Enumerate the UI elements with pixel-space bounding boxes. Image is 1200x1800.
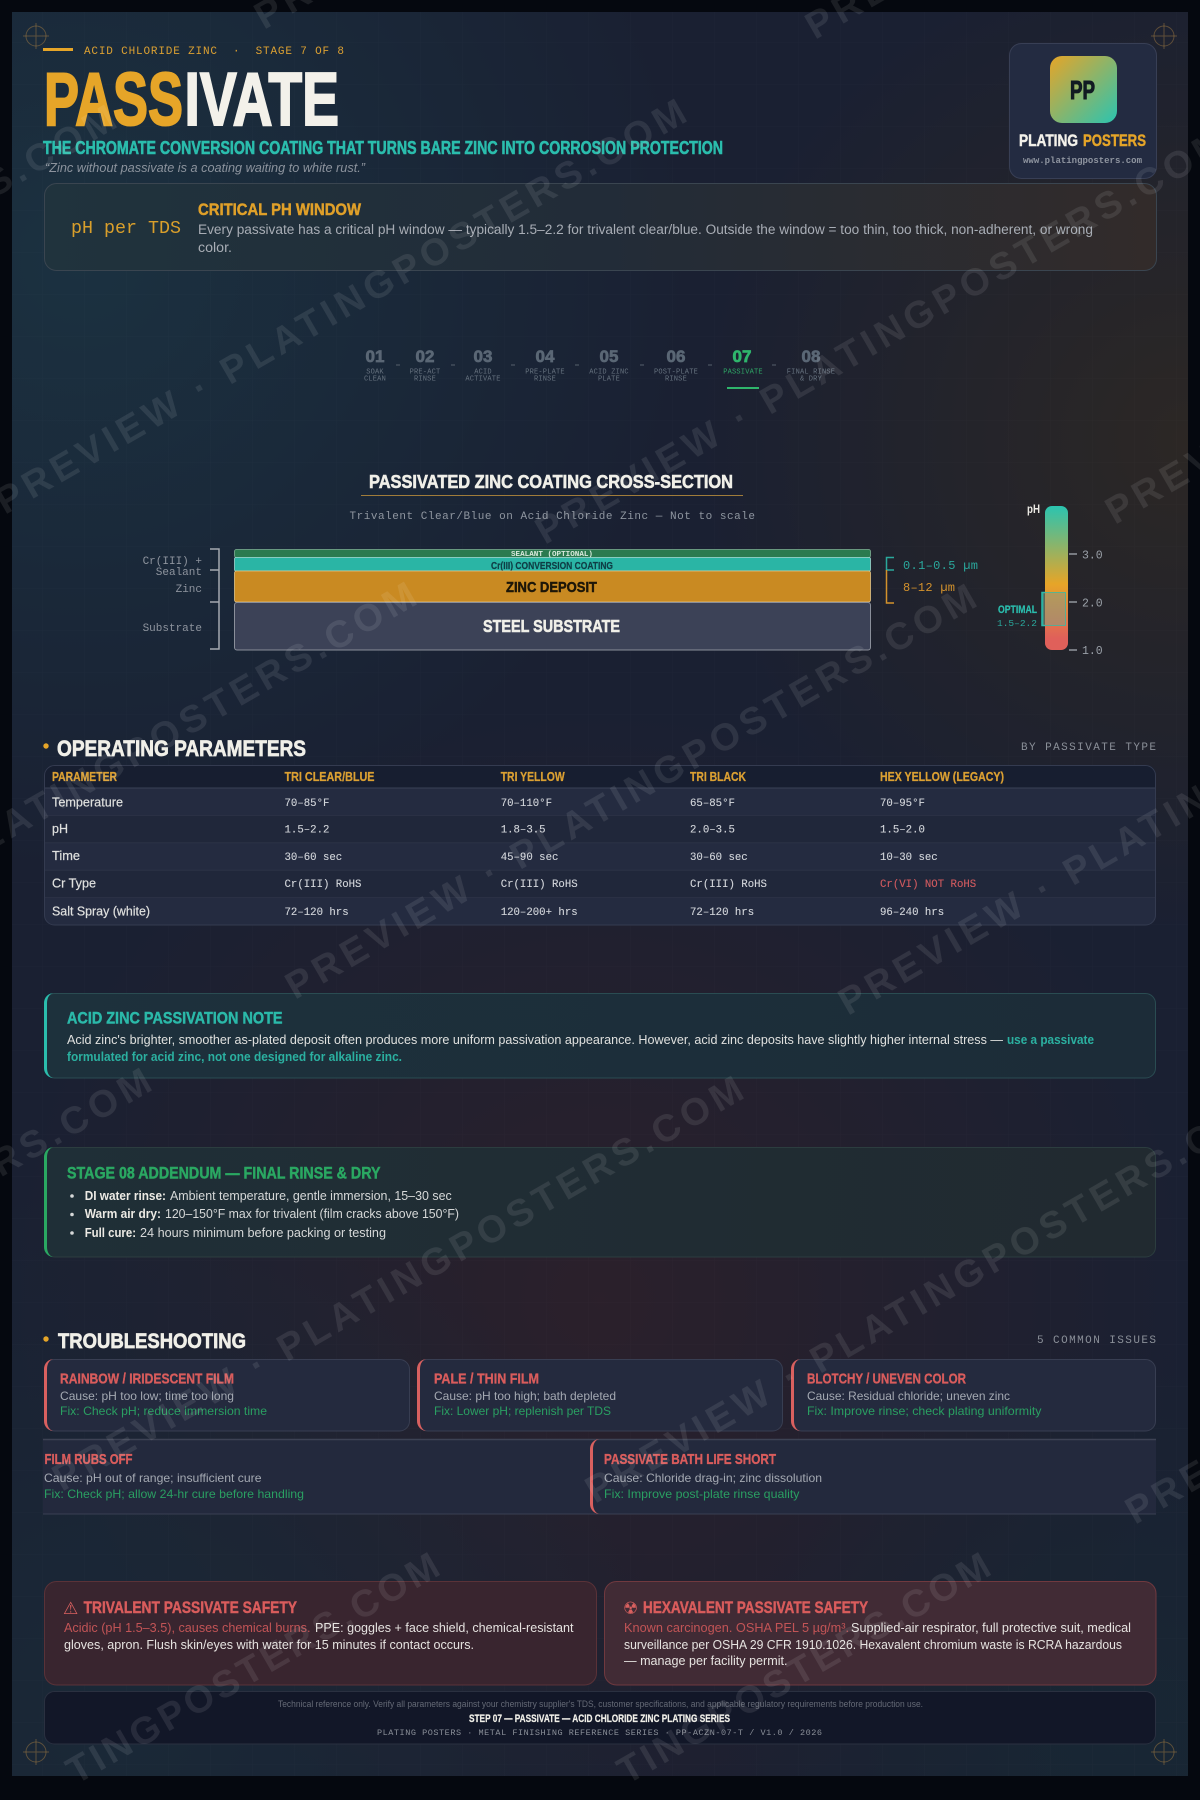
row: salt spray: 120–200+ hrs [501,907,578,919]
parameters table [44,765,1156,925]
section heading: operating parameters: OPERATING PARAMETERS [57,736,306,761]
row: time: Time [52,848,80,863]
safety text: PPE: goggles + face shield, chemical-resistant [315,1620,574,1635]
process step tracker: PRE-ACT [410,368,440,376]
header [43,46,723,175]
process step tracker: ACTIVATE [465,376,501,384]
logo name: PLATING [1019,132,1078,150]
logo name [1019,132,1146,150]
row: Cr type: Cr(III) RoHS [284,879,361,891]
safety text [624,1620,1131,1668]
table header: HEX YELLOW (LEGACY) [880,770,1004,784]
row: salt spray [52,904,944,919]
scale ticks: 1.0 [1082,645,1103,658]
row: salt spray: 72–120 hrs [690,907,754,919]
scale bar [1045,506,1068,650]
optimal band: OPTIMAL [998,604,1037,616]
layer: zinc deposit [234,571,870,602]
table header: TRI CLEAR/BLUE [284,770,374,784]
process step tracker: 06 [667,347,685,366]
row: salt spray: Salt Spray (white) [52,904,150,918]
card: film rubs off [43,1439,590,1514]
section heading: troubleshooting [43,1329,1156,1353]
card: pale film: Cause: pH too high; bath depleted [434,1389,616,1403]
addendum list: DI water rinse: [85,1188,166,1203]
safety text: Supplied-air respirator, full protective suit, medical [851,1620,1131,1635]
card: blotchy color: Cause: Residual chloride; uneven zinc [807,1389,1010,1403]
note body: Acid zinc's brighter, smoother as-plated deposit often produces more uniform passivation appearance. However, acid zinc deposits have slightly higher internal stress — [67,1032,1003,1047]
section heading: operating parameters [43,736,1156,761]
process step tracker: 07 [733,347,751,366]
safety text: — manage per facility permit. [624,1653,788,1668]
callout heading: CRITICAL PH WINDOW [198,201,361,219]
process step tracker: 02 [416,347,434,366]
card: bath life short: Fix: Improve post-plate rinse quality [604,1487,800,1501]
card: pale film: Fix: Lower pH; replenish per TDS [434,1404,611,1418]
process step tracker: CLEAN [364,376,386,384]
panel: acid zinc passivation note [44,993,1156,1078]
process step tracker: FINAL RINSE [787,368,835,376]
row: Cr type: Cr(VI) NOT RoHS [880,879,976,891]
process step tracker: 04 [536,347,555,366]
watermarks: PREVIEW · PLATINGPOSTERS.COM [0,91,694,523]
note body [67,1032,1094,1064]
process step tracker: RINSE [414,376,436,384]
row: temperature [52,794,925,810]
quote: “Zinc without passivate is a coating waiting to white rust.” [45,161,366,175]
watermarks: PREVIEW · PLATINGPOSTERS.COM [278,576,984,1008]
row: Cr type [52,876,976,891]
subtitle: THE CHROMATE CONVERSION COATING THAT TURNS BARE ZINC INTO CORROSION PROTECTION [43,138,723,158]
process step tracker: 03 [474,347,492,366]
process step tracker: 05 [600,347,618,366]
note heading: ACID ZINC PASSIVATION NOTE [67,1010,282,1028]
row: temperature: 70–85°F [284,798,329,810]
row: temperature: 70–95°F [880,798,925,810]
section heading: troubleshooting: TROUBLESHOOTING [58,1329,246,1353]
row: Cr type: Cr(III) RoHS [690,879,767,891]
addendum list: 24 hours minimum before packing or testing [140,1225,386,1240]
section heading: troubleshooting: 5 COMMON ISSUES [1037,1335,1156,1347]
row: pH: pH [52,821,68,836]
row: temperature: Temperature [52,794,123,810]
callout body [198,222,1093,255]
table header: TRI YELLOW [501,770,565,784]
eyebrow: · [233,46,240,58]
card: rainbow film: RAINBOW / IRIDESCENT FILM [60,1370,234,1388]
footer [44,1692,1156,1744]
addendum list: Warm air dry: [85,1206,161,1221]
logo name: POSTERS [1083,132,1146,150]
row: time: 45–90 sec [501,852,558,864]
row: time: 10–30 sec [880,852,938,864]
layer: zinc deposit: ZINC DEPOSIT [506,579,597,596]
row: temperature: 65–85°F [690,798,735,810]
addendum list [70,1188,459,1240]
layer: conversion coating [234,558,870,572]
cross-section diagram [143,549,978,650]
row: pH: 1.8–3.5 [501,824,546,836]
logo url: www.platingposters.com [1023,156,1143,166]
footer title: STEP 07 — PASSIVATE — ACID CHLORIDE ZINC PLATING SERIES [469,1713,730,1725]
icon: PP mark [1050,56,1117,123]
scale ticks: 2.0 [1082,598,1103,610]
row: salt spray: 96–240 hrs [880,907,944,919]
addendum list: Ambient temperature, gentle immersion, 15–30 sec [170,1188,452,1203]
layer: sealant [234,550,870,559]
diagram heading: PASSIVATED ZINC COATING CROSS-SECTION [369,472,733,492]
process step tracker: PASSIVATE [723,368,763,376]
process step tracker [364,347,835,389]
card: bath life short: Cause: Chloride drag-in; zinc dissolution [604,1471,822,1485]
left layer labels: Substrate [143,623,202,635]
left layer labels: Sealant [156,567,202,579]
card: film rubs off: FILM RUBS OFF [44,1451,132,1468]
table header: PARAMETER [52,770,117,784]
left layer labels [143,556,202,635]
diagram subtitle: Trivalent Clear/Blue on Acid Chloride Zinc — Not to scale [350,511,755,523]
process step tracker: RINSE [534,376,556,384]
thickness bracket: zinc: 8–12 µm [903,581,955,595]
process step tracker: PLATE [598,376,620,384]
card: blotchy color [791,1359,1156,1431]
process step tracker: 01 [366,347,384,366]
row: pH: 2.0–3.5 [690,824,735,836]
addendum list: 120–150°F max for trivalent (film cracks above 150°F) [165,1206,459,1221]
card: pale film [417,1359,782,1431]
card: blotchy color: Fix: Improve rinse; check plating uniformity [807,1404,1042,1418]
row: temperature: 70–110°F [501,798,552,810]
row: Cr type: Cr Type [52,876,96,890]
diagram heading [350,472,755,523]
row: time [52,848,938,864]
process step tracker: POST-PLATE [654,368,698,376]
title: PASS [44,57,183,141]
card: pale film: PALE / THIN FILM [434,1370,539,1388]
pH scale [997,504,1103,658]
process step tracker: ACID [474,368,492,376]
callout body: Every passivate has a critical pH window — typically 1.5–2.2 for trivalent clear/blue. Outside the window = too thin, too thick, non-adherent, or wrong [198,222,1093,237]
eyebrow: ACID CHLORIDE ZINC [84,46,217,58]
disclaimer: Technical reference only. Verify all parameters against your chemistry supplier's TDS, customer specifications, and applicable regulatory requirements before production use. [278,1699,923,1709]
row: salt spray: 72–120 hrs [284,907,349,919]
eyebrow: STAGE 7 OF 8 [256,46,344,58]
card: film rubs off: Cause: pH out of range; insufficient cure [44,1471,262,1485]
process step tracker: SOAK [366,368,384,376]
card: rainbow film: Cause: pH too low; time too long [60,1389,234,1403]
process step tracker: ACID ZINC [589,368,629,376]
card: rainbow film [44,1359,410,1431]
layer: steel substrate [234,602,870,650]
row: pH: 1.5–2.0 [880,824,925,836]
process step tracker: RINSE [665,376,687,384]
note body: use a passivate [1007,1032,1094,1047]
optimal band: 1.5–2.2 [997,618,1037,629]
panel: trivalent safety [44,1582,596,1685]
left layer labels: Zinc [176,584,202,596]
row: pH: 1.5–2.2 [284,824,329,836]
pH scale: pH [1027,504,1040,516]
process step tracker: PRE-PLATE [525,368,565,376]
left layer labels: Cr(III) + [143,556,202,568]
row: time: 30–60 sec [690,852,748,864]
callout: critical pH window [44,184,1156,270]
callout body: color. [198,240,232,255]
section heading: operating parameters: BY PASSIVATE TYPE [1021,742,1156,754]
safety heading: HEXAVALENT PASSIVATE SAFETY [643,1599,868,1617]
card: rainbow film: Fix: Check pH; reduce immersion time [60,1404,267,1418]
badge: pH per TDS [71,219,181,239]
icon: PP mark: PP [1070,75,1095,105]
table header: TRI BLACK [690,770,746,784]
footer series: PLATING POSTERS · METAL FINISHING REFERENCE SERIES · PP-ACZN-07-T / V1.0 / 2026 [377,1728,822,1738]
process step tracker: & DRY [800,376,823,384]
row: time: 30–60 sec [284,852,342,864]
thickness bracket: conversion: 0.1–0.5 µm [903,559,978,573]
logo card [1010,44,1156,178]
note body: formulated for acid zinc, not one designed for alkaline zinc. [67,1049,402,1064]
row: Cr type: Cr(III) RoHS [501,879,578,891]
watermarks: TINGPOSTERS.COM [610,1545,998,1793]
left bracket [210,549,219,649]
optimal band [997,592,1066,629]
layer: steel substrate: STEEL SUBSTRATE [483,616,620,636]
safety text [64,1620,574,1652]
safety text: Known carcinogen. OSHA PEL 5 µg/m³. [624,1620,849,1635]
layer: sealant: SEALANT (OPTIONAL) [511,551,593,559]
safety heading: TRIVALENT PASSIVATE SAFETY [84,1599,297,1617]
icon: radiation: ☢ [623,1599,638,1619]
safety text: Acidic (pH 1.5–3.5), causes chemical burns. [64,1620,310,1635]
card: bath life short: PASSIVATE BATH LIFE SHORT [604,1451,776,1468]
card: bath life short [590,1439,1156,1514]
process step tracker: 08 [802,347,820,366]
card: blotchy color: BLOTCHY / UNEVEN COLOR [807,1370,966,1388]
watermarks: TINGPOSTERS.COM [60,1545,447,1793]
watermarks: PREVIEW · PLATINGPOSTERS.COM [46,1068,751,1500]
icon: warning: ⚠ [63,1599,78,1619]
safety text: surveillance per OSHA 29 CFR 1910.1026. Hexavalent chromium waste is RCRA hazardous [624,1637,1122,1652]
layer: conversion coating: Cr(III) CONVERSION COATING [491,561,613,572]
title: IVATE [184,57,339,141]
eyebrow [43,46,344,58]
addendum list: Full cure: [85,1225,136,1240]
addendum heading: STAGE 08 ADDENDUM — FINAL RINSE & DRY [67,1164,380,1182]
row: pH [52,821,925,836]
title [44,57,339,141]
panel: stage 08 addendum [44,1147,1156,1257]
safety text: gloves, apron. Flush skin/eyes with water for 15 minutes if contact occurs. [64,1637,474,1652]
table header [52,770,1004,784]
card: film rubs off: Fix: Check pH; allow 24-hr cure before handling [44,1487,304,1501]
panel: hexavalent safety [604,1582,1156,1685]
thickness bracket: zinc [886,570,955,603]
scale ticks [1069,550,1103,658]
scale ticks: 3.0 [1082,550,1103,562]
